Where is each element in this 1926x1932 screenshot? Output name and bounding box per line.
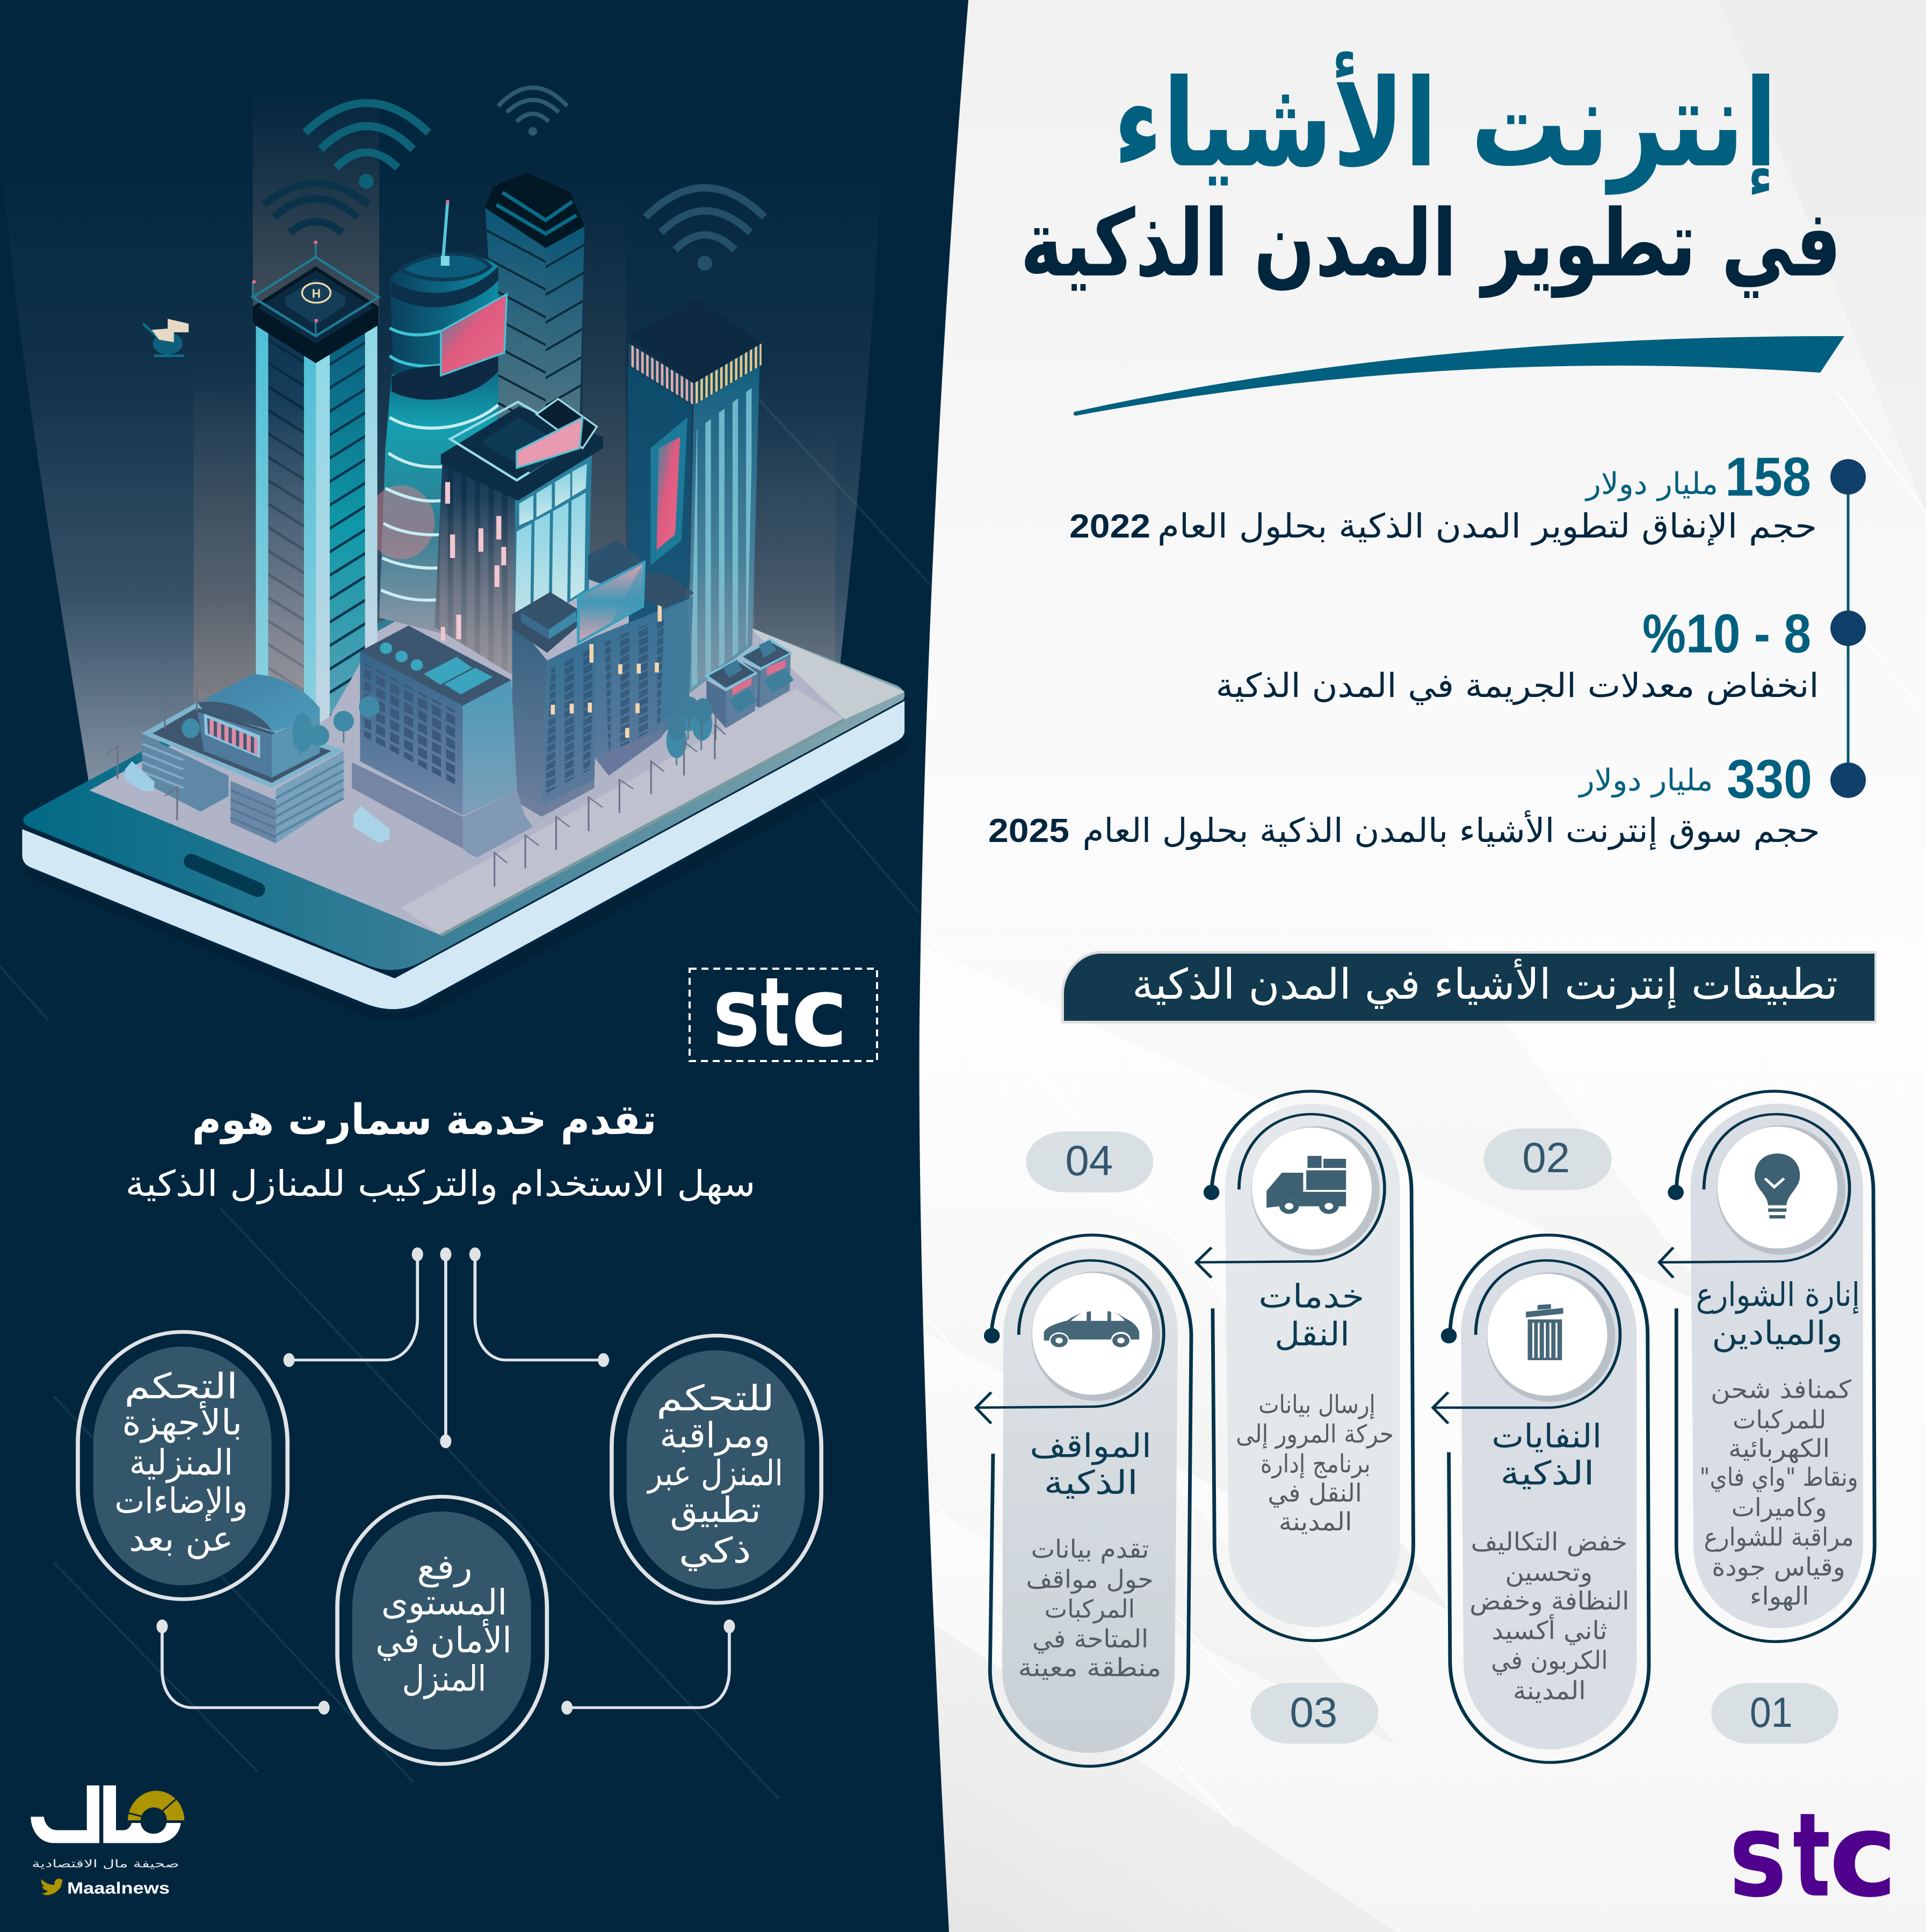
icon: car	[1044, 1310, 1139, 1347]
card: device control: المنزلية	[129, 1442, 233, 1483]
text: street lighting: وقياس جودة	[1712, 1552, 1845, 1581]
tower lower light fade	[686, 531, 755, 680]
title: line 1: إنترنت الأشياء	[1113, 51, 1777, 195]
text: smart parking: منطقة معينة	[1018, 1653, 1161, 1682]
heading: street lighting: إنارة الشوارع	[1696, 1276, 1860, 1314]
pill 3: transport	[1196, 1091, 1413, 1640]
illustration: smart city on phone	[0, 88, 911, 1020]
badge 01	[1711, 1683, 1838, 1744]
card: app monitoring: تطبيق	[670, 1490, 761, 1531]
heading: smart home: تقدم خدمة سمارت هوم	[192, 1096, 656, 1144]
logo: stc purple: s	[1729, 1788, 1787, 1923]
heading: street lighting	[1696, 1276, 1860, 1352]
tower: octagon back	[485, 173, 584, 448]
vehicles	[125, 761, 390, 843]
text: street lighting	[1700, 1375, 1858, 1611]
subheading: smart home: سهل الاستخدام والتركيب للمنازل الذكية	[126, 1163, 755, 1204]
card: app monitoring: ومراقبة	[660, 1415, 770, 1456]
text: smart parking: تقدم بيانات	[1031, 1535, 1149, 1564]
buildings: low rise front	[106, 626, 725, 887]
twitter handle: Maaalnews	[67, 1879, 170, 1898]
logo: stc purple: c	[1829, 1788, 1898, 1923]
text: smart waste	[1469, 1528, 1630, 1705]
text: smart parking	[1018, 1535, 1161, 1682]
icon: truck	[1266, 1156, 1346, 1214]
text: street lighting: للمركبات	[1733, 1405, 1826, 1434]
icon: trash can	[1526, 1304, 1563, 1360]
wifi icon small	[498, 88, 567, 136]
city ground plate	[89, 547, 845, 935]
applications diagram	[976, 1091, 1874, 1766]
wifi icon large	[305, 103, 429, 188]
badge 02: 02	[1522, 1134, 1570, 1181]
heading: smart parking	[1030, 1427, 1152, 1502]
text: smart waste: خفض التكاليف	[1471, 1528, 1627, 1557]
badge 01: 01	[1750, 1689, 1793, 1737]
stat: 158 billion: مليار دولار	[1584, 467, 1718, 502]
stat: 330 billion: 330	[1727, 749, 1812, 810]
badge 03	[1250, 1683, 1379, 1744]
stat: crime reduction: انخفاض معدلات الجريمة في المدن الذكية	[1216, 666, 1819, 705]
panel: dark left background	[0, 0, 968, 1932]
diagram: smart home benefits	[78, 1247, 821, 1764]
pill 1: street lighting	[1659, 1091, 1874, 1642]
stat: 330 billion: مليار دولار	[1577, 763, 1713, 798]
logo: stc white in dashed box	[690, 957, 877, 1068]
heading: street lighting: والميادين	[1712, 1314, 1843, 1352]
card: home security: الأمان في	[375, 1619, 512, 1661]
pill 4: smart parking	[976, 1235, 1191, 1766]
text: smart waste: النظافة وخفض	[1469, 1587, 1630, 1616]
stat: 158 billion: حجم الإنفاق لتطوير المدن الذكية بحلول العام	[1157, 506, 1817, 546]
logo: stc white in dashed box: s	[713, 957, 760, 1068]
card: app monitoring: المنزل عبر	[647, 1453, 783, 1494]
glow behind towers	[193, 91, 836, 732]
connector lines	[156, 1247, 735, 1715]
stat: crime reduction	[1216, 603, 1819, 705]
badge 02	[1483, 1129, 1612, 1190]
trees	[182, 696, 712, 765]
logo tagline: صحيفة مال الاقتصادية	[32, 1857, 179, 1870]
pill 2: smart waste	[1433, 1235, 1649, 1762]
text: transport	[1236, 1390, 1394, 1536]
warm windows	[551, 603, 662, 738]
text: street lighting: الكهربائية	[1728, 1434, 1830, 1463]
card: device control: والإضاءات	[114, 1481, 248, 1521]
text: transport: المدينة	[1279, 1507, 1352, 1536]
card: device control: التحكم	[125, 1367, 238, 1407]
tower: right tall with billboard	[628, 299, 762, 695]
text: street lighting: الهواء	[1750, 1582, 1809, 1611]
building: flat roof	[352, 626, 533, 858]
heading: transport: النقل	[1275, 1316, 1350, 1353]
logo: stc white in dashed box: t	[761, 957, 790, 1068]
stat: crime reduction: %10 - 8	[1642, 603, 1811, 664]
text: smart waste: المدينة	[1513, 1676, 1586, 1705]
card: home security: المنزل	[402, 1659, 486, 1699]
card: home security	[337, 1497, 547, 1764]
tower: curved drum	[367, 200, 507, 633]
text: transport: إرسال بيانات	[1258, 1390, 1375, 1419]
heading: smart parking: الذكية	[1044, 1464, 1138, 1502]
building: dome complex	[141, 674, 344, 844]
logo mark	[31, 1785, 184, 1843]
stat: 330 billion: 2025	[988, 812, 1069, 849]
logo: maal	[31, 1785, 184, 1898]
title swoosh	[1074, 336, 1844, 416]
card: app monitoring: للتحكم	[656, 1378, 774, 1419]
heading: smart waste: الذكية	[1500, 1454, 1595, 1492]
badge 04	[1026, 1131, 1153, 1193]
heading: smart parking: المواقف	[1030, 1427, 1152, 1465]
street lamps	[106, 684, 725, 887]
background: faint diagonal lines on dark panel	[0, 399, 931, 1799]
tower: helipad: H	[312, 287, 321, 301]
tower: helipad	[252, 241, 379, 725]
card: app monitoring: ذكي	[679, 1531, 751, 1571]
logo: stc white in dashed box: c	[791, 957, 848, 1068]
phone body	[22, 541, 911, 1020]
heading: smart waste	[1491, 1418, 1602, 1492]
stat: 158 billion	[1069, 446, 1817, 546]
section header: applications	[1061, 951, 1877, 1023]
stat: 158 billion: 2022	[1069, 508, 1150, 545]
wifi icon right	[646, 188, 765, 271]
heading: smart waste: النفايات	[1491, 1418, 1602, 1455]
trees near shops	[668, 696, 728, 741]
text: street lighting: مراقبة للشوارع	[1704, 1523, 1854, 1552]
text: transport: حركة المرور إلى	[1236, 1420, 1394, 1449]
shops	[704, 638, 794, 728]
text: smart waste: الكربون في	[1491, 1646, 1608, 1675]
card: app monitoring	[612, 1335, 821, 1603]
logo: stc purple: t	[1793, 1788, 1830, 1923]
timeline	[1830, 459, 1866, 798]
background: diagonal shaded bands	[913, 0, 1926, 1932]
text: smart parking: حول مواقف	[1026, 1565, 1153, 1594]
heading: transport: خدمات	[1258, 1277, 1364, 1316]
text: smart waste: وتحسين	[1505, 1558, 1592, 1587]
light beam	[0, 146, 882, 790]
card: device control	[78, 1332, 287, 1599]
text: transport: برنامج إدارة	[1261, 1449, 1371, 1478]
text: street lighting: وكاميرات	[1732, 1493, 1827, 1522]
phone home button	[191, 861, 258, 890]
stat: 158 billion: 158	[1725, 446, 1811, 507]
text: street lighting: كمنافذ شحن	[1711, 1375, 1852, 1404]
card: device control: بالأجهزة	[122, 1401, 242, 1443]
heading: transport	[1258, 1277, 1364, 1353]
text: smart parking: المتاحة في	[1032, 1624, 1148, 1653]
logo: stc purple	[1729, 1788, 1898, 1923]
text: street lighting: ونقاط "واي فاي"	[1700, 1463, 1858, 1492]
helicopter	[143, 319, 189, 356]
card: home security: المستوى	[381, 1582, 507, 1623]
wifi icon faint	[264, 183, 369, 233]
text: transport: النقل في	[1268, 1479, 1362, 1508]
stat: 330 billion: حجم سوق إنترنت الأشياء بالمدن الذكية بحلول العام	[1083, 810, 1820, 851]
text: smart waste: ثاني أكسيد	[1491, 1614, 1608, 1645]
stat: 330 billion	[988, 749, 1820, 851]
card: home security: رفع	[417, 1547, 473, 1587]
tower: central glass	[435, 399, 603, 676]
badge 04: 04	[1065, 1137, 1113, 1185]
buildings: center block roofs and billboard	[512, 541, 694, 653]
badge 03: 03	[1290, 1689, 1337, 1737]
text: smart parking: المركبات	[1045, 1595, 1135, 1624]
twitter handle	[41, 1878, 170, 1898]
card: device control: عن بعد	[129, 1519, 233, 1559]
icon: light bulb	[1755, 1153, 1800, 1217]
buildings: center blocks faces	[512, 597, 693, 817]
section header: applications: تطبيقات إنترنت الأشياء في المدن الذكية	[1132, 959, 1838, 1009]
billboard center	[578, 562, 644, 643]
